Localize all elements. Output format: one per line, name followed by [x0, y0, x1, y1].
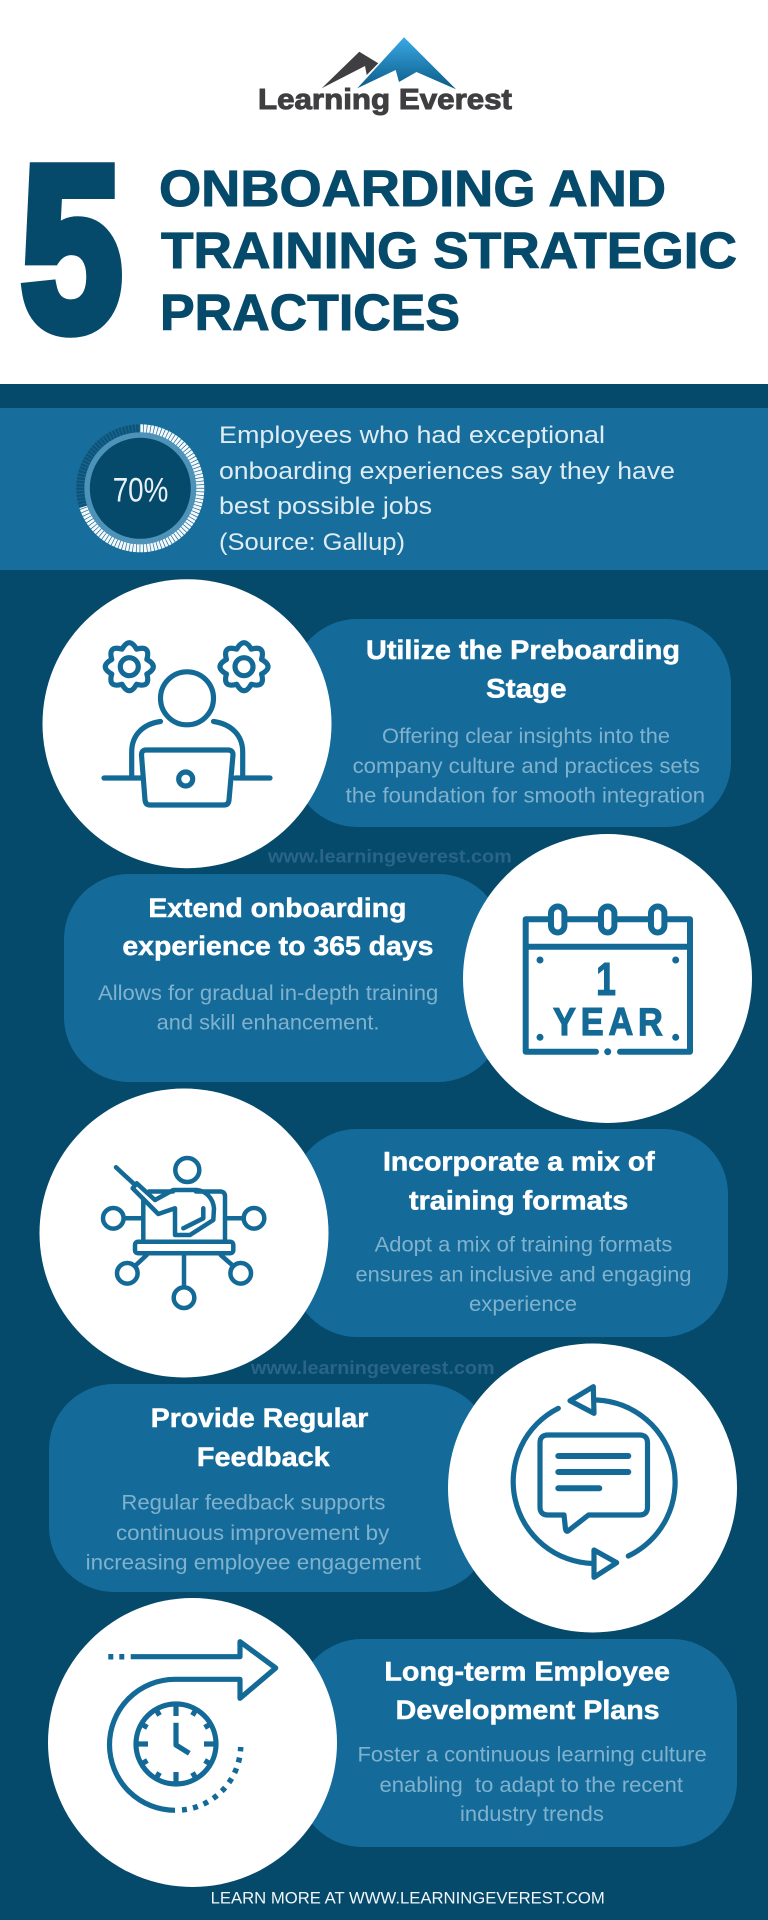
heading: [384, 1656, 670, 1725]
footer call to action: LEARN MORE AT WWW.LEARNINGEVEREST.COM: [211, 1888, 605, 1907]
panel: step 4 card: [49, 1384, 491, 1592]
heading: [151, 1403, 368, 1472]
description: the foundation for smooth integration: [346, 784, 705, 808]
description: ensures an inclusive and engaging: [356, 1263, 692, 1287]
heading: Long-term Employee: [384, 1656, 670, 1686]
icon: 1 year calendar: YEAR: [553, 1000, 668, 1043]
panel: step 2 card: [64, 874, 503, 1082]
heading: Feedback: [197, 1442, 330, 1472]
icon: blue mountain: [357, 37, 456, 89]
heading: experience to 365 days: [122, 931, 433, 961]
icon: 1 year calendar: 1: [596, 953, 616, 1005]
statistic text: Employees who had exceptional: [219, 422, 605, 449]
title: ONBOARDING AND: [159, 160, 666, 217]
circle: step 5: [48, 1598, 337, 1887]
logo wordmark: Learning Everest: [258, 84, 512, 116]
icon: clock with arrow path: [108, 1642, 276, 1810]
description: company culture and practices sets: [353, 754, 700, 778]
panel: step 1 card: [292, 619, 731, 827]
description: industry trends: [460, 1802, 604, 1826]
heading: Development Plans: [396, 1695, 660, 1725]
description: enabling to adapt to the recent: [380, 1773, 683, 1797]
description: experience: [469, 1292, 577, 1316]
chart: 70% radial gauge: [80, 428, 200, 548]
icon: 1 year calendar: [526, 906, 690, 1055]
description: [356, 1233, 692, 1316]
statistic text: onboarding experiences say they have: [219, 458, 675, 485]
heading: [366, 635, 680, 704]
panel: step 3 card: [292, 1129, 728, 1337]
circle: step 4: [448, 1344, 737, 1632]
heading: Incorporate a mix of: [383, 1147, 655, 1177]
watermark: www.learningeverest.com: [250, 1358, 495, 1378]
circle: step 1: [42, 579, 332, 868]
icon: trainer with network nodes: [103, 1158, 264, 1308]
statistic text: best possible jobs: [219, 493, 432, 520]
chart: 70% radial gauge: 70%: [113, 472, 168, 510]
circle: step 3: [40, 1088, 328, 1378]
description: [98, 981, 438, 1034]
description: Foster a continuous learning culture: [358, 1743, 707, 1767]
dark background section: [0, 384, 768, 1920]
icon: feedback loop with speech bubble: [513, 1387, 675, 1577]
statistic text: (Source: Gallup): [219, 529, 405, 556]
description: [358, 1743, 707, 1826]
description: Adopt a mix of training formats: [375, 1233, 672, 1257]
description: [86, 1490, 421, 1574]
statistic text: [219, 422, 675, 556]
description: continuous improvement by: [116, 1521, 390, 1545]
panel: statistic band: [0, 408, 768, 570]
heading: [122, 893, 433, 961]
big numeral 5: 5: [21, 119, 122, 379]
heading: Provide Regular: [151, 1403, 368, 1433]
description: Allows for gradual in-depth training: [98, 981, 438, 1005]
description: Regular feedback supports: [121, 1490, 385, 1514]
heading: Extend onboarding: [148, 893, 406, 923]
panel: step 5 card: [297, 1639, 737, 1847]
logo: Learning Everest: [258, 37, 512, 116]
description: [346, 724, 705, 808]
circle: step 2: [463, 834, 752, 1123]
watermark: www.learningeverest.com: [267, 847, 512, 867]
icon: grey mountain: [322, 52, 378, 88]
description: increasing employee engagement: [86, 1550, 421, 1574]
description: Offering clear insights into the: [382, 724, 670, 748]
title: PRACTICES: [160, 284, 460, 341]
title: TRAINING STRATEGIC: [161, 222, 737, 279]
icon: person at laptop with gears: [104, 643, 270, 805]
heading: training formats: [409, 1185, 628, 1215]
heading: Stage: [486, 674, 567, 704]
description: and skill enhancement.: [157, 1010, 380, 1034]
title: [159, 160, 737, 341]
heading: [383, 1147, 655, 1215]
heading: Utilize the Preboarding: [366, 635, 680, 665]
